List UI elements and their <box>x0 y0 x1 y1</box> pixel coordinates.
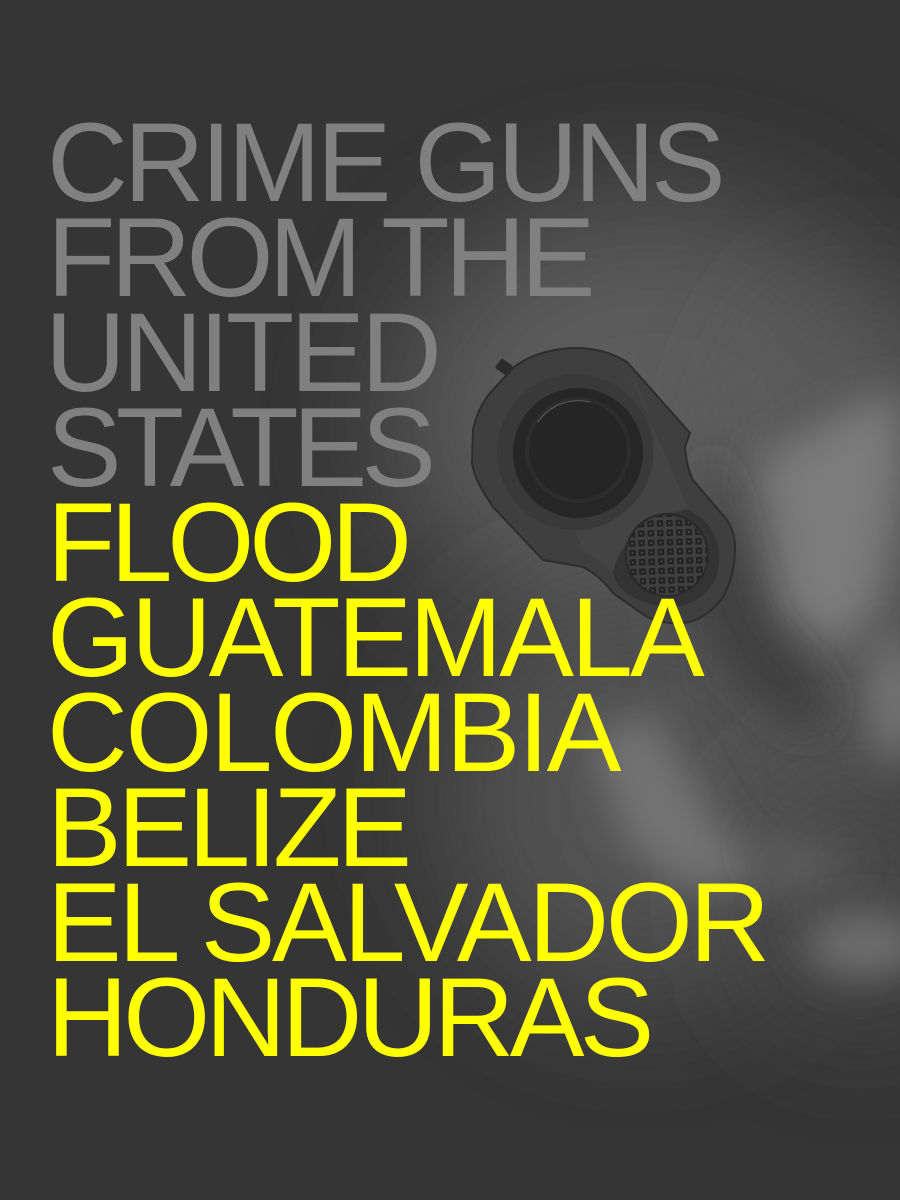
list of countries: COLOMBIA <box>47 670 622 795</box>
recoil plug ring <box>613 510 719 607</box>
list of countries: FLOOD <box>47 480 407 605</box>
title: crime guns from the United States: STATES <box>47 385 431 510</box>
background: blurred photo of a pistol <box>346 154 900 1030</box>
list of countries: EL SALVADOR <box>47 860 767 985</box>
barrel bushing ring <box>497 374 653 530</box>
poster <box>52 122 900 1057</box>
recoil plug knurling <box>626 514 708 596</box>
pistol outer body <box>472 348 735 623</box>
list of countries <box>47 480 767 1080</box>
barrel opening dark ring <box>513 388 643 518</box>
barrel bore <box>525 397 631 503</box>
pistol face plate <box>575 368 688 570</box>
title: crime guns from the United States: FROM THE <box>47 195 591 320</box>
list of countries: BELIZE <box>47 765 408 890</box>
title: crime guns from the United States: UNITED <box>45 290 438 415</box>
list of countries: HONDURAS <box>47 955 650 1080</box>
title: crime guns from the United States <box>45 100 722 510</box>
front sight <box>495 358 513 376</box>
icon: pistol muzzle <box>472 348 735 623</box>
title: crime guns from the United States: CRIME GUNS <box>47 100 722 225</box>
list of countries: GUATEMALA <box>47 575 705 700</box>
